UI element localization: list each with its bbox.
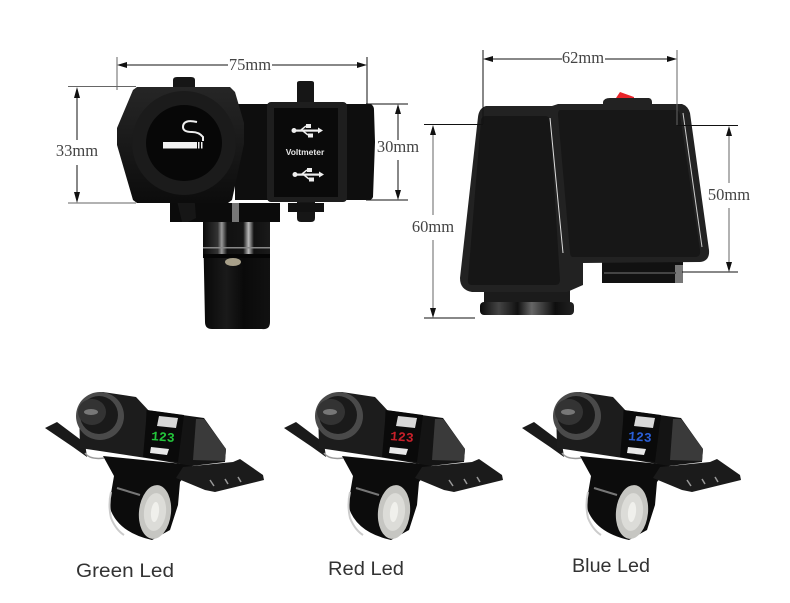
voltmeter panel with USB icons [267,102,347,202]
dimension: 62mm: 62mm [562,48,604,67]
red switch [603,92,652,106]
socket housing [117,87,244,203]
red LED product: 123 [390,429,414,446]
label: Blue Led: Blue Led [572,556,650,577]
clip at the back [602,262,683,283]
right side housing [235,104,375,200]
label: Red Led: Red Led [328,559,404,580]
dimension: 75mm [117,55,367,104]
dimension: 30mm: 30mm [377,137,419,156]
barrel at bottom [480,288,574,315]
icon: USB upper [292,124,323,138]
dimension: 75mm: 75mm [229,55,271,74]
mounting tabs [170,77,324,222]
blue LED product: 123 [628,429,652,446]
clamp below the front view [203,222,270,329]
dimension: 60mm: 60mm [412,217,454,236]
red LED product [284,392,503,541]
dimension: 50mm: 50mm [708,185,750,204]
dimension: 33mm: 33mm [56,141,98,160]
right panel [558,110,700,257]
dimension: 60mm [412,124,483,318]
label: Green Led: Green Led [76,561,174,582]
voltmeter label: Voltmeter [286,147,325,157]
front view of charger [117,77,375,329]
side housing shell [460,104,709,292]
side view of charger [460,92,709,315]
socket cap with cigarette icon [132,91,236,195]
green LED product: 123 [151,429,175,446]
dimension: 30mm [366,104,419,200]
dimension: 33mm [56,86,136,203]
left panel [468,116,560,285]
green LED product [45,392,264,541]
dimension: 50mm [677,126,750,272]
blue LED product [522,392,741,541]
dimension: 62mm [483,48,677,125]
icon: USB lower [292,168,324,182]
